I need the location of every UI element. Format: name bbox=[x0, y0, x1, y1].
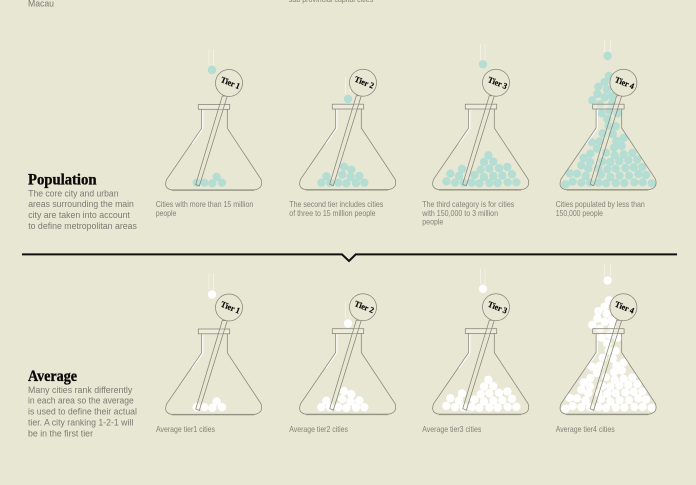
caption: population tier 1 bbox=[156, 200, 254, 218]
flask: average tier 4: Tier 4 bbox=[613, 299, 636, 316]
text: average description bbox=[28, 385, 137, 439]
flask: average tier 4 bbox=[560, 264, 656, 414]
flask: population tier 2 bbox=[300, 69, 396, 190]
flask: population tier 3: Tier 3 bbox=[486, 74, 509, 91]
panel: average intro bbox=[28, 368, 137, 439]
flask: average tier 2: Tier 2 bbox=[353, 298, 375, 315]
caption: average tier 4: Average tier4 cities bbox=[556, 425, 615, 434]
text: average description: Many cities rank differently bbox=[28, 385, 132, 396]
text: average description: is used to define their actual bbox=[28, 406, 137, 417]
text: average description: in each area so the average bbox=[28, 396, 134, 407]
caption: population tier 3: with 150,000 to 3 million bbox=[421, 209, 498, 218]
flask: average tier 2 bbox=[300, 294, 396, 414]
caption: population tier 4: Cities populated by less than bbox=[556, 200, 645, 209]
caption: population tier 3 bbox=[421, 200, 514, 227]
caption: population tier 3: people bbox=[422, 218, 444, 227]
caption: population tier 2: of three to 15 million people bbox=[289, 209, 376, 218]
flask: population tier 1 bbox=[166, 49, 262, 190]
flask: average tier 1: Tier 1 bbox=[219, 299, 242, 316]
caption: average tier 3: Average tier3 cities bbox=[422, 425, 481, 434]
flask: population tier 2: Tier 2 bbox=[353, 74, 375, 91]
heading: Average: Average bbox=[28, 368, 77, 385]
text: average description: be in the first tier bbox=[28, 428, 94, 439]
flask: population tier 1: Tier 1 bbox=[219, 74, 242, 91]
flask: average tier 3: Tier 3 bbox=[486, 299, 509, 316]
panel: population intro bbox=[28, 172, 137, 232]
caption: population tier 2: The second tier includes cities bbox=[289, 200, 383, 209]
caption: average tier 1: Average tier1 cities bbox=[156, 425, 215, 434]
caption: average tier 2: Average tier2 cities bbox=[289, 425, 348, 434]
text: population description: to define metropolitan areas bbox=[28, 221, 137, 232]
caption: population tier 4 bbox=[556, 200, 645, 218]
flask: population tier 4: Tier 4 bbox=[613, 74, 636, 91]
text: population description: city are taken into account bbox=[28, 210, 130, 221]
flask: average tier 1 bbox=[166, 274, 262, 415]
caption: population tier 2 bbox=[289, 200, 383, 218]
text: population description: areas surrounding the main bbox=[28, 199, 134, 210]
caption: population tier 1: people bbox=[156, 209, 177, 218]
flask: population tier 3 bbox=[433, 44, 529, 190]
caption: population tier 1: Cities with more than 15 million bbox=[156, 200, 254, 209]
heading: Population: Population bbox=[28, 172, 97, 188]
flask: population tier 4 bbox=[560, 40, 656, 190]
caption: population tier 4: 150,000 people bbox=[556, 209, 603, 218]
divider with notch bbox=[22, 254, 677, 261]
text: population description bbox=[28, 188, 137, 232]
flask: average tier 3 bbox=[433, 268, 529, 414]
caption: population tier 3: The third category is for cities bbox=[422, 200, 514, 209]
text: average description: tier. A city ranking 1-2-1 will bbox=[28, 417, 133, 428]
text: population description: The core city and urban bbox=[28, 188, 119, 199]
